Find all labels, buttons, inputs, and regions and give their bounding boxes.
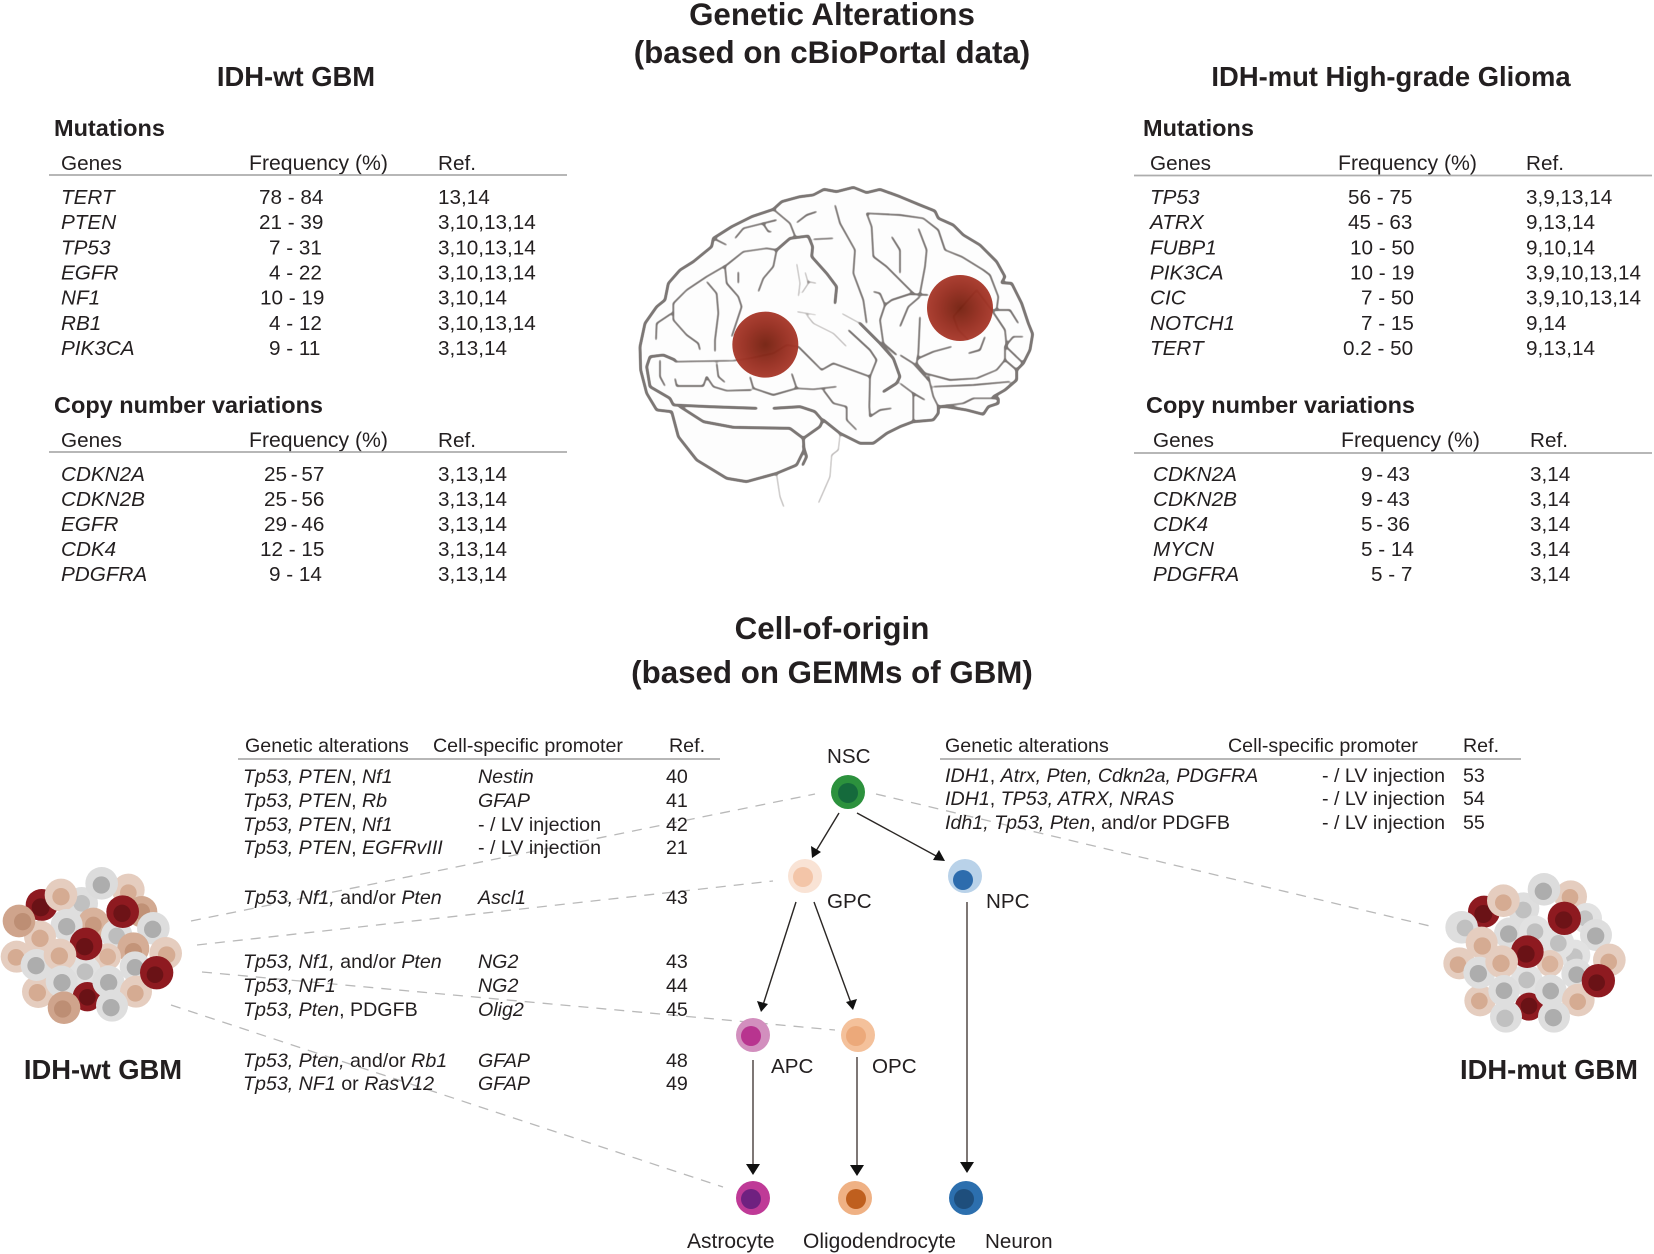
heading: IDH-wt GBM: IDH-wt GBM [217,61,375,92]
panel: IDH-mut copy number variations table: 5 - 7 [1371,563,1412,586]
panel: IDH-mut GEMM table [940,735,1521,834]
panel: IDH-wt mutations table: 3,10,13,14 [438,211,536,234]
panel: IDH-wt mutations table: PTEN [61,211,116,234]
panel: IDH-mut mutations table: CIC [1150,287,1187,310]
panel: IDH-wt copy number variations table: Genes [61,429,122,452]
panel: IDH-wt copy number variations table: 3,13,14 [438,563,507,586]
panel: IDH-mut copy number variations table [1134,392,1652,586]
panel: IDH-wt GEMM table: Tp53, NF1 or RasV12 [243,1073,434,1095]
panel: IDH-wt GEMM table: GFAP [478,790,530,812]
panel: IDH-wt copy number variations table: 29 - 46 [264,513,324,536]
arrows: lineage tree [746,813,974,1176]
panel: IDH-wt copy number variations table: 3,13,14 [438,463,507,486]
panel: IDH-wt GEMM table: - / LV injection [478,814,601,836]
panel: IDH-wt mutations table: 10 - 19 [260,287,324,310]
cell: OPC [841,1018,917,1078]
panel: IDH-mut copy number variations table: CDKN2A [1153,463,1237,486]
panel: IDH-mut copy number variations table: Ref. [1530,429,1568,452]
panel: IDH-wt GEMM table: 44 [666,975,688,997]
panel: IDH-mut GEMM table: Ref. [1463,735,1499,757]
cell: NPC [948,859,1030,913]
panel: IDH-wt GEMM table: Tp53, Nf1, and/or Pten [243,887,442,909]
panel: IDH-wt GEMM table: Tp53, NF1 [243,975,336,997]
panel: IDH-mut mutations table: 9,13,14 [1526,211,1595,234]
panel: IDH-wt mutations table [49,115,567,360]
panel: IDH-mut GEMM table: 55 [1463,812,1485,834]
cell: NSC [827,745,871,809]
panel: IDH-mut copy number variations table: 3,14 [1530,488,1570,511]
panel: IDH-wt copy number variations table: 9 - 14 [269,563,322,586]
panel: IDH-mut mutations table: 7 - 50 [1361,287,1414,310]
panel: IDH-mut mutations table: FUBP1 [1150,236,1217,260]
cell: Neuron [949,1181,1053,1253]
label: IDH-wt GBM: IDH-wt GBM [24,1054,182,1085]
panel: IDH-mut mutations table: 9,10,14 [1526,236,1595,260]
panel: IDH-mut mutations table: 3,9,10,13,14 [1526,287,1641,310]
panel: IDH-wt mutations table: 13,14 [438,186,490,209]
title: genetic alterations: (based on cBioPortal data) [634,35,1030,70]
panel: IDH-mut mutations table: 10 - 19 [1350,262,1414,284]
panel: IDH-wt copy number variations table: 12 - 15 [260,538,324,561]
panel: IDH-mut copy number variations table: 5 - 14 [1361,538,1414,561]
panel: IDH-mut copy number variations table: Genes [1153,429,1214,452]
panel: IDH-wt mutations table: 3,10,13,14 [438,236,536,260]
panel: IDH-mut mutations table: 56 - 75 [1348,186,1412,209]
panel: IDH-mut mutations table: PIK3CA [1150,262,1224,284]
title: cell-of-origin [631,611,1033,690]
panel: IDH-wt mutations table: Ref. [438,152,476,175]
title: cell-of-origin: Cell-of-origin [735,611,929,646]
panel: IDH-wt GEMM table: 43 [666,887,688,909]
cell: NPC: NPC [986,890,1030,913]
panel: IDH-wt GEMM table: Tp53, Pten, and/or Rb1 [243,1050,447,1072]
panel: IDH-wt GEMM table: GFAP [478,1050,530,1072]
panel: IDH-wt copy number variations table: EGFR [61,513,119,536]
tumour cluster: IDH-mut GBM [1443,873,1626,1033]
cell: GPC: GPC [827,890,872,913]
panel: IDH-wt GEMM table: Cell-specific promoter [433,735,623,757]
panel: IDH-wt GEMM table: - / LV injection [478,837,601,859]
panel: IDH-wt mutations table: Mutations [54,115,165,141]
panel: IDH-mut copy number variations table: Copy number variations [1146,392,1415,418]
panel: IDH-wt copy number variations table: 3,13,14 [438,538,507,561]
panel: IDH-wt GEMM table: 42 [666,814,688,836]
panel: IDH-mut copy number variations table: 3,14 [1530,563,1570,586]
panel: IDH-mut GEMM table: IDH1, Atrx, Pten, Cdkn2a, PDGFRA [945,765,1258,787]
panel: IDH-mut mutations table: 45 - 63 [1348,211,1412,234]
panel: IDH-wt copy number variations table: PDGFRA [61,563,147,586]
panel: IDH-mut GEMM table: - / LV injection [1322,765,1445,787]
panel: IDH-mut GEMM table: Idh1, Tp53, Pten, and/or PDGFB [945,812,1230,834]
panel: IDH-wt GEMM table: 41 [666,790,688,812]
panel: IDH-wt GEMM table: NG2 [478,951,518,973]
panel: IDH-wt mutations table: RB1 [61,312,101,335]
panel: IDH-mut GEMM table: - / LV injection [1322,788,1445,810]
panel: IDH-wt GEMM table: 43 [666,951,688,973]
panel: IDH-wt mutations table: NF1 [61,287,100,310]
panel: IDH-mut copy number variations table: MYCN [1153,538,1214,561]
cell: Astrocyte: Astrocyte [687,1230,775,1253]
dashed connector lines [171,794,1434,1187]
panel: IDH-wt GEMM table: 49 [666,1073,688,1095]
panel: IDH-mut GEMM table: IDH1, TP53, ATRX, NRAS [945,788,1174,810]
panel: IDH-mut copy number variations table: 3,14 [1530,513,1570,536]
panel: IDH-mut mutations table: NOTCH1 [1150,312,1235,335]
cell: Oligodendrocyte [803,1181,956,1253]
panel: IDH-mut copy number variations table: 5 - 36 [1361,513,1410,536]
panel: IDH-wt mutations table: 3,10,14 [438,287,507,310]
panel: IDH-wt GEMM table: 48 [666,1050,688,1072]
panel: IDH-mut mutations table: 9,13,14 [1526,337,1595,360]
panel: IDH-wt mutations table: 9 - 11 [269,337,320,360]
panel: IDH-mut GEMM table: Cell-specific promoter [1228,735,1418,757]
panel: IDH-mut mutations table: Genes [1150,152,1211,175]
panel: IDH-wt mutations table: EGFR [61,262,119,284]
cell: Astrocyte [687,1181,775,1253]
panel: IDH-mut mutations table: 3,9,10,13,14 [1526,262,1641,284]
heading: IDH-mut High-grade Glioma: IDH-mut High-grade Glioma [1211,61,1571,92]
panel: IDH-wt copy number variations table: Frequency (%) [249,429,388,452]
panel: IDH-mut copy number variations table: PDGFRA [1153,563,1239,586]
panel: IDH-mut mutations table: 7 - 15 [1361,312,1414,335]
panel: IDH-wt mutations table: 4 - 12 [269,312,322,335]
panel: IDH-mut copy number variations table: CDK4 [1153,513,1208,536]
cell: Oligodendrocyte: Oligodendrocyte [803,1230,956,1253]
panel: IDH-wt GEMM table [238,735,720,1095]
panel: IDH-mut GEMM table: 53 [1463,765,1485,787]
panel: IDH-mut GEMM table: Genetic alterations [945,735,1109,757]
panel: IDH-wt mutations table: TERT [61,186,116,209]
panel: IDH-wt GEMM table: 21 [666,837,688,859]
panel: IDH-wt mutations table: 3,10,13,14 [438,312,536,335]
panel: IDH-wt GEMM table: Olig2 [478,999,524,1021]
panel: IDH-wt copy number variations table: 3,13,14 [438,513,507,536]
panel: IDH-mut copy number variations table: CDKN2B [1153,488,1237,511]
panel: IDH-wt GEMM table: Genetic alterations [245,735,409,757]
title: genetic alterations [634,0,1030,70]
panel: IDH-wt GEMM table: Tp53, PTEN, Rb [243,790,387,812]
panel: IDH-wt copy number variations table: 25 - 57 [264,463,324,486]
panel: IDH-mut GEMM table: - / LV injection [1322,812,1445,834]
title: cell-of-origin: (based on GEMMs of GBM) [631,655,1033,690]
panel: IDH-wt GEMM table: GFAP [478,1073,530,1095]
panel: IDH-wt mutations table: 3,10,13,14 [438,262,536,284]
panel: IDH-wt GEMM table: 45 [666,999,688,1021]
cell: GPC [788,859,872,913]
tumour cluster: IDH-wt GBM [1,867,182,1024]
panel: IDH-wt GEMM table: Tp53, Nf1, and/or Pten [243,951,442,973]
panel: IDH-wt copy number variations table [49,392,567,586]
panel: IDH-mut mutations table: Frequency (%) [1338,152,1477,175]
panel: IDH-wt mutations table: 3,13,14 [438,337,507,360]
panel: IDH-wt copy number variations table: CDKN2A [61,463,145,486]
label: IDH-mut GBM: IDH-mut GBM [1460,1054,1638,1085]
cell: Neuron: Neuron [985,1230,1053,1253]
panel: IDH-mut mutations table: TERT [1150,337,1205,360]
panel: IDH-mut mutations table [1134,115,1652,360]
panel: IDH-mut mutations table: 0.2 - 50 [1343,337,1413,360]
panel: IDH-mut mutations table: 9,14 [1526,312,1566,335]
panel: IDH-mut mutations table: TP53 [1150,186,1200,209]
panel: IDH-mut mutations table: Mutations [1143,115,1254,141]
panel: IDH-wt copy number variations table: Ref. [438,429,476,452]
panel: IDH-wt copy number variations table: 25 - 56 [264,488,324,511]
cell: APC [736,1018,813,1078]
panel: IDH-wt mutations table: PIK3CA [61,337,135,360]
panel: IDH-wt copy number variations table: Copy number variations [54,392,323,418]
panel: IDH-mut copy number variations table: 3,14 [1530,463,1570,486]
panel: IDH-wt mutations table: TP53 [61,236,111,260]
panel: IDH-mut copy number variations table: 9 - 43 [1361,488,1410,511]
panel: IDH-mut mutations table: Ref. [1526,152,1564,175]
panel: IDH-wt GEMM table: Nestin [478,766,534,788]
panel: IDH-mut copy number variations table: Frequency (%) [1341,429,1480,452]
panel: IDH-mut GEMM table: 54 [1463,788,1485,810]
panel: IDH-mut copy number variations table: 9 - 43 [1361,463,1410,486]
panel: IDH-mut mutations table: ATRX [1148,211,1205,234]
panel: IDH-wt GEMM table: Tp53, PTEN, Nf1 [243,814,393,836]
panel: IDH-wt GEMM table: Ascl1 [477,887,526,909]
panel: IDH-mut mutations table: 10 - 50 [1350,236,1414,260]
panel: IDH-wt mutations table: 21 - 39 [259,211,323,234]
panel: IDH-wt copy number variations table: 3,13,14 [438,488,507,511]
panel: IDH-wt mutations table: 4 - 22 [269,262,322,284]
panel: IDH-wt GEMM table: Tp53, Pten, PDGFB [243,999,418,1021]
panel: IDH-wt mutations table: 78 - 84 [259,186,323,209]
panel: IDH-wt GEMM table: Tp53, PTEN, Nf1 [243,766,393,788]
cell: NSC: NSC [827,745,871,768]
panel: IDH-mut copy number variations table: 3,14 [1530,538,1570,561]
panel: IDH-wt copy number variations table: CDK4 [61,538,116,561]
panel: IDH-mut mutations table: 3,9,13,14 [1526,186,1612,209]
panel: IDH-wt copy number variations table: CDKN2B [61,488,145,511]
tumour site: frontal [927,275,993,341]
panel: IDH-wt mutations table: 7 - 31 [269,236,322,260]
icon: brain with tumour sites [640,187,1033,507]
panel: IDH-wt GEMM table: Tp53, PTEN, EGFRvIII [243,837,443,859]
panel: IDH-wt mutations table: Frequency (%) [249,152,388,175]
panel: IDH-wt GEMM table: Ref. [669,735,705,757]
cell: OPC: OPC [872,1055,917,1078]
panel: IDH-wt GEMM table: NG2 [478,975,518,997]
panel: IDH-wt GEMM table: 40 [666,766,688,788]
panel: IDH-wt mutations table: Genes [61,152,122,175]
cell: APC: APC [771,1055,813,1078]
tumour site: temporal [732,312,798,378]
